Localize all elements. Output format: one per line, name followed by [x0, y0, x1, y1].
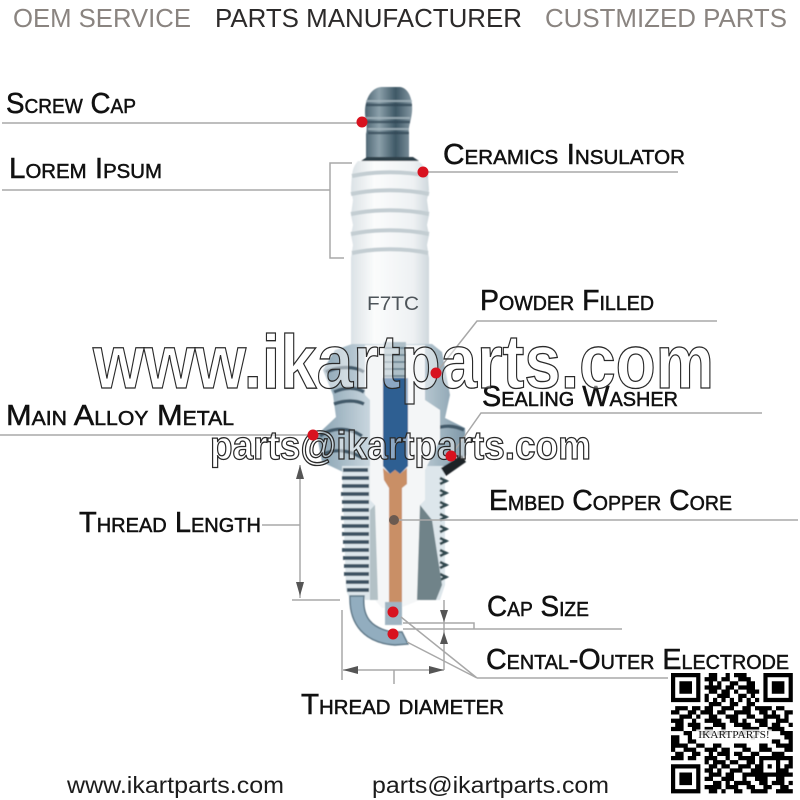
labels: Embed Copper Core	[489, 485, 732, 517]
labels: Lorem Ipsum	[9, 153, 162, 185]
labels: Cental-Outer Electrode	[486, 644, 789, 676]
model code: F7TC	[367, 294, 419, 315]
labels: Screw Cap	[6, 88, 136, 120]
labels	[6, 88, 789, 721]
copper core callout dot	[389, 515, 399, 525]
terminal screw cap	[365, 87, 412, 158]
header: service tagline: CUSTMIZED PARTS	[545, 3, 787, 33]
ground electrode	[350, 596, 408, 645]
header: service tagline	[13, 3, 787, 33]
red callout dots	[308, 116, 456, 640]
inner cutaway body	[365, 345, 440, 608]
gasket washer	[441, 455, 466, 476]
metal shell upper	[317, 344, 466, 472]
ceramic insulator	[351, 161, 429, 345]
spark plug illustration	[317, 87, 466, 645]
labels: Sealing Washer	[482, 381, 678, 413]
threaded insulator stud	[384, 342, 406, 380]
footer: website: www.ikartparts.com	[66, 772, 284, 798]
centre electrode tip	[385, 602, 402, 625]
threaded section	[342, 466, 445, 600]
header: service tagline: PARTS MANUFACTURER	[215, 3, 522, 33]
QR code	[671, 675, 793, 791]
labels: Cap Size	[487, 591, 589, 623]
blue conductor	[383, 378, 408, 474]
labels: Thread Length	[79, 507, 261, 539]
QR code: IKARTPARTS!	[698, 730, 770, 741]
watermark: email: parts@ikartparts.com	[210, 424, 591, 468]
leader lines and callouts	[0, 123, 798, 684]
footer: email: parts@ikartparts.com	[372, 772, 609, 798]
copper core	[383, 468, 407, 602]
labels: Ceramics Insulator	[443, 139, 685, 171]
watermark: website: www.ikartparts.com	[92, 320, 714, 405]
header: service tagline: OEM SERVICE	[13, 3, 191, 33]
labels: Main Alloy Metal	[6, 400, 234, 432]
labels: Thread diameter	[301, 689, 504, 721]
labels: Powder Filled	[480, 285, 654, 317]
